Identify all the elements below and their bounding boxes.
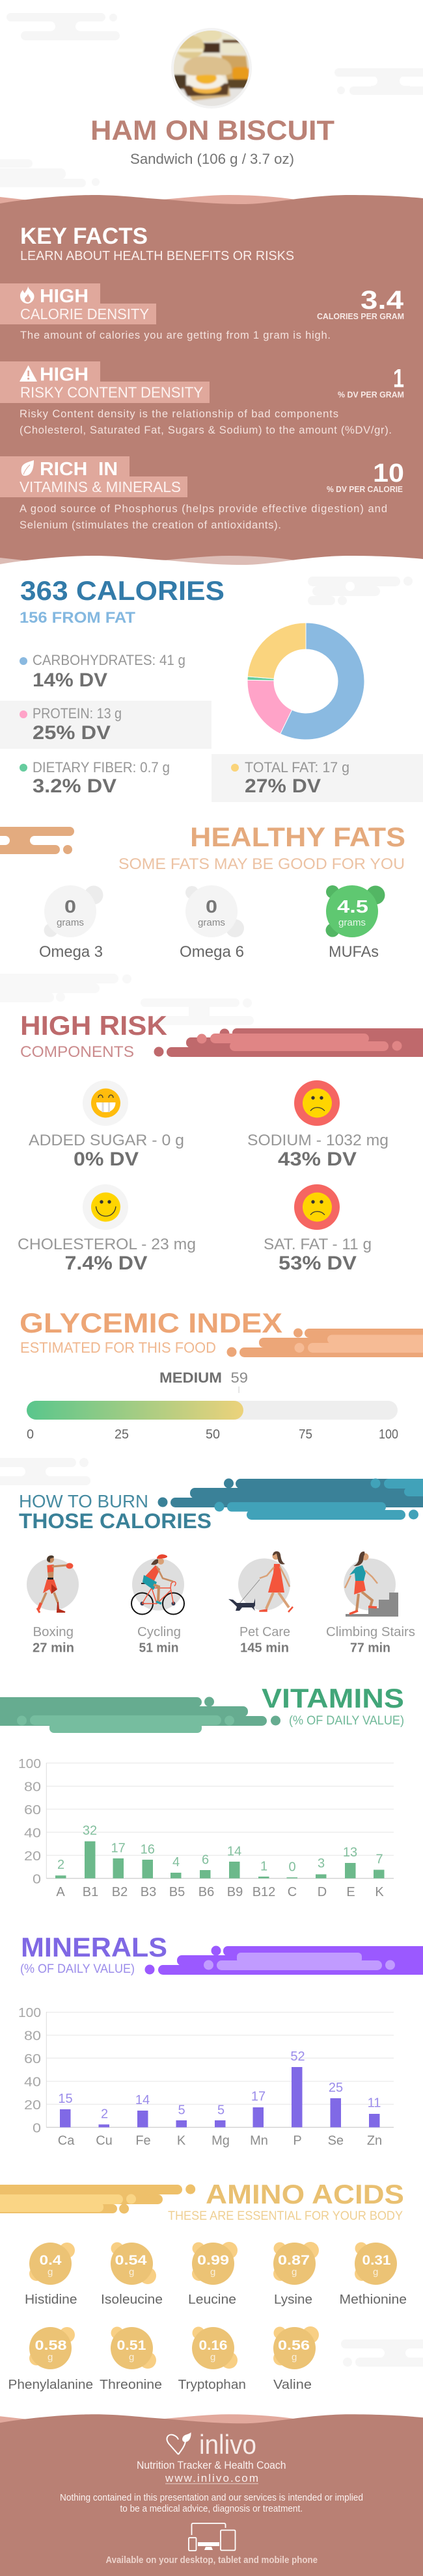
gauge scale labels: 50 [206, 1427, 220, 1442]
subheading: SOME FATS MAY BE GOOD FOR YOU [118, 855, 405, 873]
bar chart: minerals: Cu [96, 2133, 113, 2148]
fact: risky content density: RISKY CONTENT DENSITY [20, 384, 203, 400]
bar chart: vitamins: 7 [375, 1853, 383, 1867]
amino: valine: 0.56 [278, 2338, 310, 2353]
gauge scale labels: 0 [27, 1427, 34, 1442]
subheading: ESTIMATED FOR THIS FOOD [20, 1339, 216, 1356]
header cloud: green [0, 1697, 280, 1733]
legend: total fat [231, 759, 349, 797]
item: omega 6: grams [198, 917, 225, 928]
bar chart: minerals: Mg [212, 2133, 230, 2148]
gauge scale labels: 75 [299, 1427, 312, 1442]
bar chart: minerals: Fe [135, 2133, 151, 2148]
bar chart: vitamins: A [56, 1885, 65, 1899]
legend: carbohydrates: 14% DV [33, 670, 107, 691]
activity labels: Cycling [137, 1625, 181, 1639]
item: sodium [247, 1080, 389, 1170]
bar chart: vitamins: 13 [343, 1845, 357, 1860]
bar chart: minerals: 25 [329, 2081, 343, 2095]
bar chart: minerals: 40 [24, 2075, 41, 2089]
logo wordmark: inlivo [199, 2429, 256, 2460]
amino: threonine [100, 2327, 162, 2392]
bar chart: vitamins: D [318, 1885, 327, 1899]
website link: www.inlivo.com [165, 2472, 258, 2484]
fact: rich in vitamins and minerals: 10 [373, 459, 404, 488]
bar chart: minerals: K [177, 2133, 186, 2148]
bar chart: minerals: 15 [58, 2092, 73, 2106]
heading line 2: THOSE CALORIES [19, 1509, 212, 1533]
icon: flame [20, 286, 34, 304]
activity labels [33, 1625, 415, 1655]
activity labels: Boxing [33, 1625, 74, 1639]
bar chart: vitamins: 0 [33, 1872, 41, 1886]
subheading: THESE ARE ESSENTIAL FOR YOUR BODY [168, 2209, 403, 2223]
amino: tryptophan: 0.16 [199, 2338, 228, 2353]
header cloud: purple [144, 1946, 423, 1975]
gauge bar [27, 1401, 398, 1420]
heading line 1: HOW TO BURN [19, 1491, 148, 1511]
legend: dietary fiber: 3.2% DV [33, 775, 116, 797]
bar chart: vitamins: 40 [24, 1827, 41, 1841]
bar chart: minerals: 5 [178, 2103, 185, 2118]
bar chart: vitamins: 14 [227, 1845, 241, 1859]
item: added sugar: ADDED SUGAR - 0 g [29, 1132, 184, 1149]
bar chart: vitamins: 6 [202, 1853, 209, 1867]
icon: devices [189, 2523, 236, 2551]
panel: minerals [18, 1932, 423, 2148]
gauge scale labels: 100 [379, 1427, 398, 1442]
activity labels: 27 min [33, 1641, 74, 1655]
bar chart: vitamins: 3 [318, 1856, 325, 1871]
bar chart: minerals: 2 [101, 2107, 108, 2122]
item: mufas: MUFAs [329, 943, 379, 961]
panel: glycemic index [20, 1308, 423, 1442]
food photo [171, 28, 252, 109]
amino: methionine: 0.31 [362, 2253, 391, 2268]
subheading: (% OF DAILY VALUE) [289, 1714, 404, 1728]
header cloud: yellow [0, 2184, 195, 2214]
item: added sugar: 0% DV [74, 1149, 139, 1170]
activity labels: Climbing Stairs [326, 1625, 415, 1639]
activity labels: 77 min [350, 1641, 390, 1655]
background cloud near valine [341, 2339, 423, 2367]
amino: histidine [25, 2243, 77, 2307]
bar chart: minerals: Se [328, 2133, 344, 2148]
disclaimer [60, 2493, 363, 2514]
disclaimer: to be a medical advice, diagnosis or treatment. [120, 2504, 303, 2514]
bar chart: minerals: 14 [135, 2093, 150, 2107]
amino: valine [273, 2326, 319, 2392]
amino: leucine: g [210, 2267, 215, 2278]
donut chart [247, 623, 364, 740]
fact: rich in vitamins and minerals: Selenium (stimulates the creation of antioxidants). [20, 519, 281, 531]
background cloud top right [334, 68, 423, 95]
panel: high risk [18, 1010, 423, 1274]
gauge readout: 59 [230, 1370, 248, 1386]
title: HAM ON BISCUIT [90, 115, 334, 146]
amino: threonine: 0.51 [117, 2338, 146, 2353]
amino: histidine: g [48, 2267, 53, 2278]
background clouds above high risk [0, 974, 254, 1025]
fact: rich in vitamins and minerals [0, 456, 404, 531]
fact: risky content density: (Cholesterol, Saturated Fat, Sugars & Sodium) to the amount (%DV/gr). [20, 424, 392, 436]
bar chart: vitamins: B5 [169, 1885, 185, 1899]
activity labels: 51 min [139, 1641, 178, 1655]
heading: healthy fats: HEALTHY FATS [190, 822, 405, 852]
fact: risky content density: % DV PER GRAM [338, 390, 404, 399]
amino: tryptophan: g [210, 2352, 215, 2363]
bar chart: vitamins: B6 [198, 1885, 214, 1899]
bar chart: vitamins: B9 [227, 1885, 243, 1899]
panel: total fat background [212, 754, 423, 802]
bar chart: vitamins: B2 [112, 1885, 128, 1899]
disclaimer: Nothing contained in this presentation and our services is intended or implied [60, 2493, 363, 2503]
amino: phenylalanine: g [48, 2352, 53, 2363]
amino: lysine: g [292, 2267, 297, 2278]
footer note: Available on your desktop, tablet and mobile phone [105, 2555, 318, 2566]
legend: carbohydrates: CARBOHYDRATES: 41 g [33, 652, 185, 668]
amino: tryptophan: Tryptophan [178, 2378, 246, 2392]
bar chart: vitamins: 80 [24, 1780, 41, 1794]
amino: valine: g [292, 2352, 297, 2363]
item: mufas: 4.5 [337, 896, 368, 917]
legend: protein: PROTEIN: 13 g [33, 705, 122, 722]
bar chart: minerals: 0 [33, 2122, 41, 2136]
subtitle: Sandwich (106 g / 3.7 oz) [130, 151, 294, 167]
amino: threonine: g [129, 2352, 134, 2363]
item: mufas [325, 885, 385, 961]
item: saturated fat: 53% DV [279, 1253, 357, 1274]
activity: pet care [228, 1551, 293, 1612]
panel: amino acids [0, 2179, 423, 2392]
item: saturated fat: SAT. FAT - 11 g [264, 1236, 372, 1253]
fact: calorie density: HIGH [40, 286, 89, 307]
tagline: Nutrition Tracker & Health Coach [137, 2459, 286, 2471]
item: omega 6: 0 [206, 896, 217, 917]
header cloud: teal [157, 1478, 423, 1520]
amino: tryptophan [178, 2327, 246, 2392]
amino: histidine: 0.4 [39, 2253, 62, 2268]
bar chart: vitamins: 32 [83, 1824, 97, 1838]
bar chart: vitamins: 17 [111, 1841, 126, 1855]
amino: valine: Valine [273, 2378, 312, 2392]
legend: total fat: TOTAL FAT: 17 g [245, 759, 349, 775]
icon: warning triangle [20, 365, 37, 382]
bar chart: vitamins: B3 [141, 1885, 156, 1899]
fact: rich in vitamins and minerals: VITAMINS & MINERALS [20, 478, 181, 495]
item: mufas: grams [338, 917, 366, 928]
amino: lysine: Lysine [274, 2293, 312, 2307]
amino: leucine: 0.99 [197, 2253, 229, 2268]
fact: rich in vitamins and minerals: RICH IN [40, 459, 118, 480]
fact: rich in vitamins and minerals: % DV PER CALORIE [327, 484, 403, 494]
amino: leucine: Leucine [188, 2293, 236, 2307]
legend: dietary fiber: DIETARY FIBER: 0.7 g [33, 759, 170, 775]
bar chart: minerals: 5 [217, 2103, 225, 2118]
item: omega 3: grams [57, 917, 84, 928]
heading: vitamins: VITAMINS [262, 1683, 404, 1713]
bar chart: vitamins: B1 [83, 1885, 98, 1899]
item: added sugar [29, 1080, 184, 1170]
item: cholesterol: 7.4% DV [65, 1253, 147, 1274]
bar chart: minerals: 80 [24, 2029, 41, 2044]
bar chart: minerals [18, 2006, 394, 2148]
item: omega 6: Omega 6 [180, 943, 244, 961]
panel: vitamins [0, 1683, 404, 1899]
amino: leucine [188, 2242, 238, 2307]
bar chart: vitamins: C [288, 1885, 297, 1899]
gauge readout: MEDIUM [159, 1370, 222, 1386]
amino: lysine: 0.87 [278, 2253, 310, 2268]
bar chart: minerals: Ca [58, 2133, 75, 2148]
panel: protein background [0, 701, 212, 749]
subheading: (% OF DAILY VALUE) [20, 1962, 135, 1976]
header cloud: red [154, 1028, 423, 1057]
heading: minerals: MINERALS [21, 1932, 167, 1962]
bar chart: minerals: 17 [251, 2089, 266, 2103]
subheading: from fat: 156 FROM FAT [20, 609, 135, 627]
item: omega 3: 0 [64, 896, 76, 917]
activity: climbing stairs [344, 1552, 398, 1617]
bar chart: vitamins: 60 [24, 1803, 41, 1817]
heading: high risk: HIGH RISK [20, 1010, 167, 1041]
bar chart: vitamins: K [375, 1885, 384, 1899]
amino: phenylalanine: Phenylalanine [8, 2378, 93, 2392]
panel: key facts [0, 195, 423, 579]
fact: calorie density: CALORIE DENSITY [20, 306, 149, 322]
fact: calorie density: The amount of calories you are getting from 1 gram is high. [20, 330, 331, 341]
background cloud top left [0, 13, 134, 40]
heading: amino acids: AMINO ACIDS [206, 2179, 404, 2209]
amino: isoleucine: g [129, 2267, 134, 2278]
bar chart: vitamins [18, 1757, 394, 1899]
bar chart: minerals: 11 [368, 2096, 381, 2110]
gauge scale labels: 25 [115, 1427, 129, 1442]
heading: glycemic index: GLYCEMIC INDEX [20, 1308, 282, 1339]
bar chart: minerals: 20 [24, 2098, 41, 2113]
amino: methionine: g [373, 2267, 378, 2278]
bar chart: vitamins: E [346, 1885, 355, 1899]
bar chart: vitamins: 4 [172, 1855, 180, 1869]
legend: protein [20, 705, 122, 744]
legend: dietary fiber [20, 759, 170, 797]
item: omega 3: Omega 3 [39, 943, 103, 961]
bar chart: vitamins: 0 [288, 1860, 296, 1875]
bar chart: vitamins: 16 [141, 1842, 155, 1856]
fact: calorie density: 3.4 [361, 286, 404, 315]
legend: carbohydrates [20, 652, 185, 691]
amino: isoleucine: Isoleucine [101, 2293, 163, 2307]
amino: phenylalanine [8, 2327, 93, 2392]
fact: calorie density [0, 283, 404, 341]
panel: calories [0, 575, 423, 802]
amino: methionine [340, 2243, 407, 2307]
background cloud mid left [0, 159, 100, 187]
background cloud [308, 577, 413, 605]
legend: total fat: 27% DV [245, 775, 321, 797]
amino: isoleucine: 0.54 [115, 2253, 147, 2268]
gauge readout [159, 1370, 248, 1393]
panel: how to burn those calories [19, 1478, 423, 1655]
bar chart: minerals: 52 [290, 2049, 305, 2064]
amino: lysine [273, 2242, 319, 2307]
panel: healthy fats [0, 822, 405, 961]
amino: isoleucine [101, 2243, 163, 2307]
item: cholesterol [18, 1184, 196, 1274]
activity: boxing [27, 1555, 79, 1613]
item: sodium: SODIUM - 1032 mg [247, 1132, 389, 1149]
bar chart: minerals: 100 [18, 2006, 41, 2020]
amino: threonine: Threonine [100, 2378, 162, 2392]
bar chart: vitamins: 2 [57, 1858, 64, 1872]
subheading: COMPONENTS [20, 1043, 134, 1061]
heading: calories: 363 CALORIES [20, 575, 225, 606]
bar chart: vitamins: B12 [252, 1885, 275, 1899]
legend: protein: 25% DV [33, 722, 111, 744]
amino: phenylalanine: 0.58 [35, 2338, 67, 2353]
activity labels: Pet Care [239, 1625, 290, 1639]
amino: histidine: Histidine [25, 2293, 77, 2307]
item: sodium: 43% DV [278, 1149, 357, 1170]
item: omega 3 [39, 885, 103, 961]
item: saturated fat [264, 1184, 372, 1274]
fact: risky content density: HIGH [40, 364, 89, 385]
item: omega 6 [180, 885, 244, 961]
fact: calorie density: CALORIES PER GRAM [317, 311, 404, 321]
heading: key facts: KEY FACTS [20, 224, 148, 249]
bar chart: vitamins: 100 [18, 1757, 41, 1771]
bar chart: minerals: Zn [367, 2133, 382, 2148]
panel: footer [0, 2414, 423, 2576]
bar chart: minerals: P [293, 2133, 302, 2148]
header cloud: orange [226, 1329, 423, 1357]
bar chart: vitamins: 1 [260, 1859, 267, 1873]
header cloud: orange [0, 827, 74, 854]
item: cholesterol: CHOLESTEROL - 23 mg [18, 1236, 196, 1253]
gauge scale labels [27, 1427, 398, 1442]
icon: leaf [21, 460, 34, 476]
logo: heart and leaf [167, 2432, 191, 2454]
activity: cycling [131, 1554, 184, 1615]
amino: methionine: Methionine [340, 2293, 407, 2307]
fact: risky content density: 1 [393, 364, 404, 393]
fact: rich in vitamins and minerals: A good source of Phosphorus (helps provide effective digestion) and [20, 503, 387, 515]
fact: risky content density: Risky Content density is the relationship of bad components [20, 408, 338, 420]
bar chart: minerals: Mn [250, 2133, 268, 2148]
activity labels: 145 min [240, 1641, 289, 1655]
subheading: LEARN ABOUT HEALTH BENEFITS OR RISKS [20, 249, 294, 263]
bar chart: vitamins: 20 [24, 1849, 41, 1864]
bar chart: minerals: 60 [24, 2052, 41, 2066]
background cloud above burn section [0, 1458, 90, 1485]
fact: risky content density [0, 361, 404, 436]
